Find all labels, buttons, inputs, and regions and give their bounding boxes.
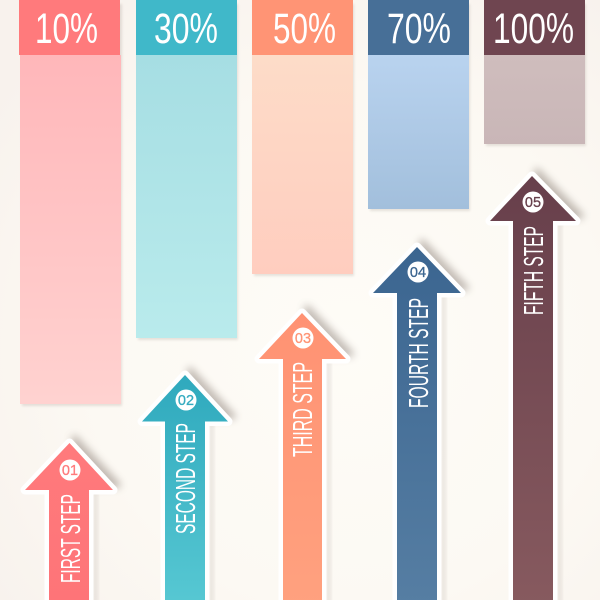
arrow: second step: [142, 370, 233, 600]
badge: 01: [60, 460, 80, 480]
label: fifth step: FIFTH STEP: [518, 226, 549, 315]
label: third step: THIRD STEP: [287, 362, 318, 457]
badge: 02: [176, 390, 196, 410]
panel: 100% bar: [484, 0, 586, 146]
heading: 100%: 100%: [493, 5, 574, 53]
label: fourth step: FOURTH STEP: [403, 298, 434, 408]
badge: 01: 01: [62, 463, 78, 479]
label: second step: SECOND STEP: [170, 423, 201, 534]
badge: 05: 05: [525, 195, 541, 211]
heading: 70%: 70%: [387, 5, 451, 53]
arrow: fourth step: [373, 242, 466, 600]
heading: 30%: 30%: [154, 5, 218, 53]
heading: 10%: 10%: [35, 5, 98, 53]
heading: 50%: 50%: [273, 5, 336, 53]
arrow: third step: [259, 308, 351, 600]
panel: 10% bar: [19, 0, 122, 406]
panel: 30% bar: [136, 0, 238, 340]
badge: 03: [292, 328, 314, 348]
arrow: fifth step: [490, 171, 581, 600]
label: first step: FIRST STEP: [55, 494, 86, 583]
badge: 03: 03: [295, 331, 311, 347]
badge: 04: [408, 262, 428, 282]
badge: 04: 04: [410, 265, 426, 281]
arrow: first step: [25, 438, 118, 600]
badge: 05: [522, 192, 544, 212]
panel: 50% bar: [252, 0, 354, 276]
badge: 02: 02: [178, 393, 194, 409]
panel: 70% bar: [368, 0, 470, 211]
